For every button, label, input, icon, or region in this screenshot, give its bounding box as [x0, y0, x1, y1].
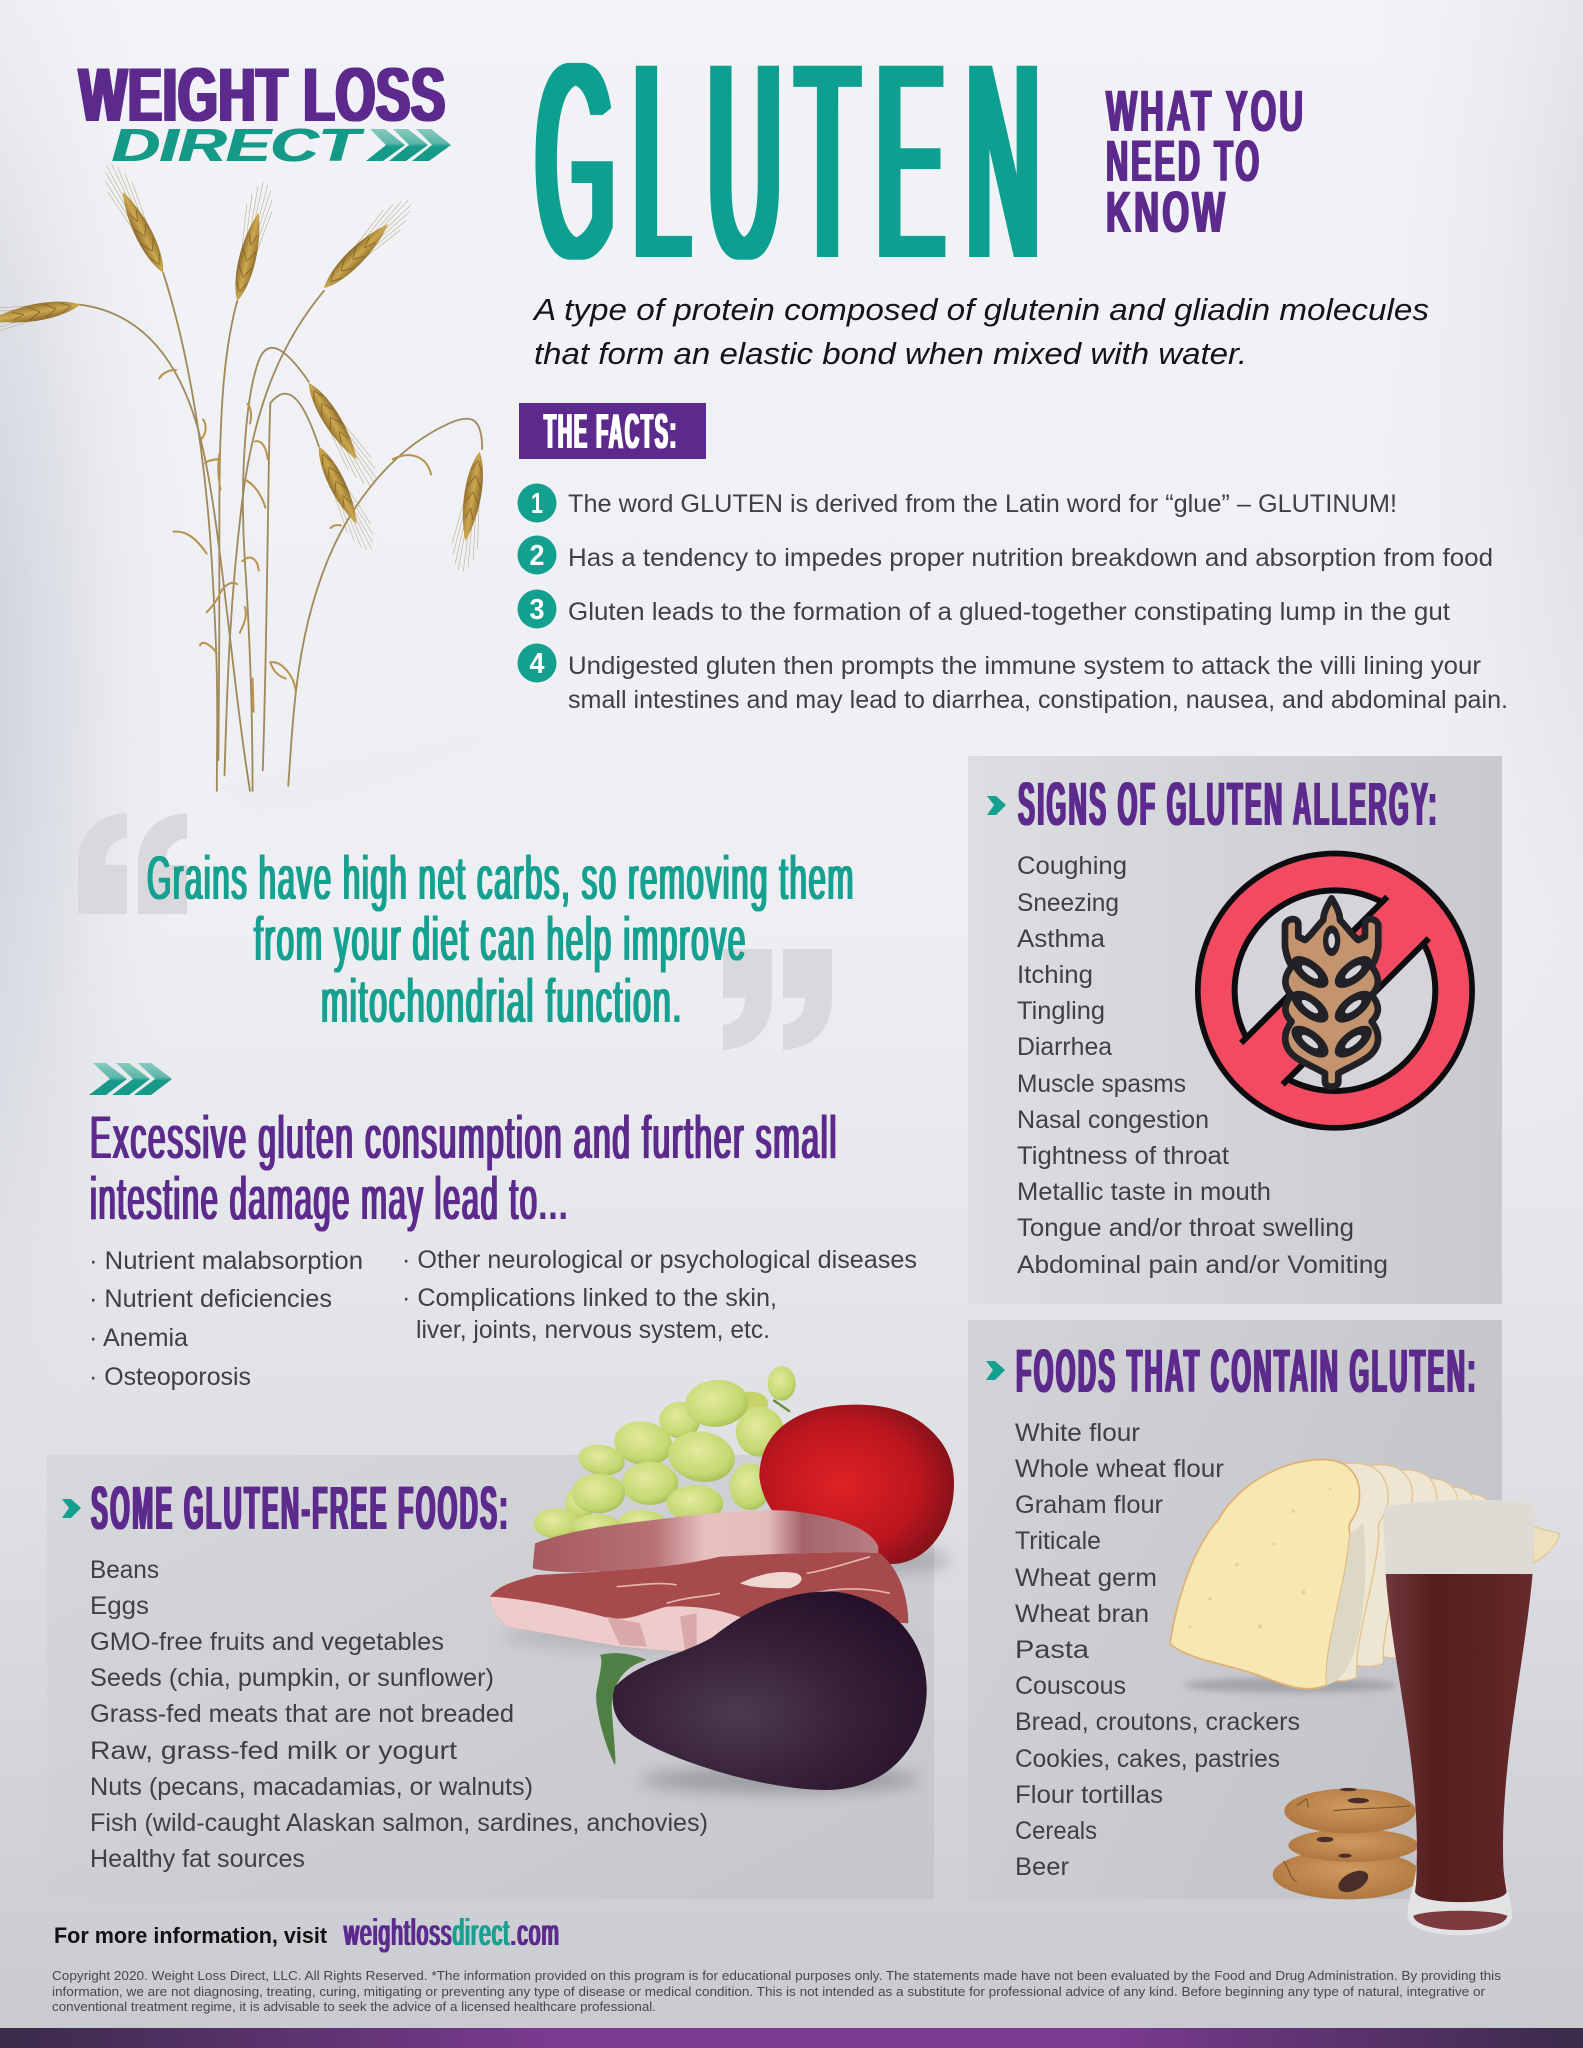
fact 4: Undigested gluten then prompts the immune system to attack the villi lining your — [568, 652, 1481, 680]
eggplant body — [613, 1592, 927, 1790]
fact 1: The word GLUTEN is derived from the Latin word for “glue” – GLUTINUM! — [568, 490, 1397, 518]
fact 2: Has a tendency to impedes proper nutrition breakdown and absorption from food — [568, 544, 1493, 572]
footer: more information: For more information, visit — [54, 1923, 328, 1948]
gluten-free list: Healthy fat sources — [90, 1845, 305, 1873]
fact 3 — [518, 590, 1450, 628]
fact 2 — [518, 536, 1493, 574]
heading: The Facts — [519, 403, 706, 459]
quote text: from your diet can help improve — [254, 905, 747, 973]
symptoms list: Sneezing — [1017, 889, 1119, 917]
foods list: Cookies, cakes, pastries — [1015, 1745, 1280, 1773]
gluten-free list: Raw, grass-fed milk or yogurt — [90, 1737, 457, 1765]
list: consequences column two: liver, joints, nervous system, etc. — [416, 1316, 770, 1344]
footer bar — [0, 2028, 1583, 2048]
fact 4: small intestines and may lead to diarrhea, constipation, nausea, and abdominal pain. — [568, 686, 1508, 714]
foods list: Pasta — [1015, 1636, 1089, 1664]
heading: excessive gluten consumption: intestine damage may lead to... — [90, 1165, 569, 1232]
foods list — [1015, 1419, 1300, 1881]
symptoms list — [1017, 852, 1388, 1279]
foods list: Whole wheat flour — [1015, 1455, 1224, 1483]
eggplant leaf — [596, 1653, 647, 1765]
list: consequences column one: · Anemia — [89, 1324, 188, 1352]
list: consequences column two: · Other neurological or psychological diseases — [402, 1246, 917, 1274]
subtitle: What you need to know — [1106, 79, 1306, 245]
bread stacked slices — [1208, 1463, 1493, 1681]
symptoms list: Abdominal pain and/or Vomiting — [1017, 1251, 1388, 1279]
fact 2: 2 — [530, 540, 544, 572]
cookies — [1273, 1788, 1421, 1899]
fact 1 — [518, 484, 1397, 522]
foods list: Beer — [1015, 1853, 1069, 1881]
illustration: grapes, apple, meat and eggplant — [490, 1366, 954, 1793]
illustration: wheat stalks — [0, 159, 510, 811]
symptoms list: Tingling — [1017, 997, 1105, 1025]
list: consequences column two — [402, 1246, 917, 1344]
fact 4 — [518, 644, 1508, 714]
footer: more information — [54, 1912, 560, 1953]
logo: Weight Loss Direct: WEIGHT LOSS — [79, 53, 446, 138]
logo: Weight Loss Direct: DIRECT — [112, 119, 365, 171]
foods list: Flour tortillas — [1015, 1781, 1163, 1809]
logo: Weight Loss Direct — [79, 53, 451, 171]
copyright notice: information, we are not diagnosing, treating, curing, mitigating or preventing any type of disease or medical condition. This is not intended as a substitute for professional advice of any kind. Before beginning any type of natural, integrative or — [52, 1985, 1485, 1999]
gluten-free list — [90, 1556, 708, 1873]
symptoms list: Asthma — [1017, 925, 1105, 953]
definition text — [532, 292, 1429, 371]
icon: arrow — [987, 796, 1006, 815]
gluten-free list: Grass-fed meats that are not breaded — [90, 1700, 514, 1728]
quote text: Grains have high net carbs, so removing them — [147, 844, 855, 912]
fact 3: Gluten leads to the formation of a glued-together constipating lump in the gut — [568, 598, 1450, 626]
fact 1: 1 — [531, 488, 543, 520]
list: consequences column one: · Nutrient malabsorption — [89, 1247, 363, 1275]
symptoms list: Metallic taste in mouth — [1017, 1178, 1271, 1206]
icon: teal chevrons — [89, 1063, 172, 1095]
foods list: Cereals — [1015, 1817, 1097, 1845]
gluten-free list: GMO-free fruits and vegetables — [90, 1628, 444, 1656]
fact 3: 3 — [530, 594, 544, 626]
icon: arrow — [62, 1499, 81, 1518]
symptoms list: Muscle spasms — [1017, 1070, 1186, 1098]
footer: more information: weightlossdirect.com — [343, 1912, 560, 1953]
icon: opening quote mark — [78, 813, 187, 914]
symptoms list: Diarrhea — [1017, 1033, 1112, 1061]
bread far slice — [1533, 1527, 1560, 1563]
text: THE FACTS: — [544, 405, 678, 459]
foods list: Wheat germ — [1015, 1564, 1157, 1592]
panel: some gluten-free foods — [47, 1455, 934, 1899]
subtitle: What you need to know: KNOW — [1106, 180, 1228, 245]
icon: arrow — [986, 1361, 1005, 1380]
symptoms list: Tightness of throat — [1017, 1142, 1229, 1170]
quote text — [147, 844, 855, 1035]
upper meat — [533, 1510, 878, 1572]
panel: some gluten-free foods: SOME GLUTEN-FREE FOODS: — [91, 1474, 510, 1542]
gluten-free list: Fish (wild-caught Alaskan salmon, sardines, anchovies) — [90, 1809, 708, 1837]
icon: closing quote mark — [723, 949, 832, 1050]
gluten-free list: Nuts (pecans, macadamias, or walnuts) — [90, 1773, 533, 1801]
apple — [759, 1405, 954, 1564]
panel: signs of gluten allergy — [968, 756, 1502, 1304]
panel: foods that contain gluten — [968, 1320, 1502, 1899]
gluten-free list: Eggs — [90, 1592, 149, 1620]
foods list: Bread, croutons, crackers — [1015, 1708, 1300, 1736]
title: GLUTEN: GLUTEN — [536, 7, 1039, 317]
definition text: that form an elastic bond when mixed with water. — [534, 336, 1247, 371]
gluten-free list: Seeds (chia, pumpkin, or sunflower) — [90, 1664, 494, 1692]
copyright notice: Copyright 2020. Weight Loss Direct, LLC. All Rights Reserved. *The information provided on this program is for educational purposes only. The statements made have not been evaluated by the Food and Drug Administration. By providing this — [52, 1969, 1501, 1983]
facts list — [518, 484, 1508, 714]
symptoms list: Tongue and/or throat swelling — [1017, 1214, 1354, 1242]
heading: excessive gluten consumption: Excessive gluten consumption and further small — [90, 1104, 838, 1171]
foods list: Wheat bran — [1015, 1600, 1149, 1628]
quote text: mitochondrial function. — [321, 967, 683, 1035]
foods list: Graham flour — [1015, 1491, 1163, 1519]
symptoms list: Coughing — [1017, 852, 1127, 880]
foods list: White flour — [1015, 1419, 1140, 1447]
foods list: Couscous — [1015, 1672, 1126, 1700]
fact 4: 4 — [530, 648, 544, 680]
list: consequences column one: · Nutrient deficiencies — [89, 1285, 332, 1313]
subtitle: What you need to know: WHAT YOU — [1106, 79, 1306, 144]
lower meat — [490, 1553, 908, 1652]
list: consequences column one: · Osteoporosis — [89, 1363, 251, 1391]
foods list: Triticale — [1015, 1527, 1101, 1555]
bread front slice — [1170, 1460, 1365, 1689]
list: consequences column two: · Complications linked to the skin, — [402, 1284, 777, 1312]
gluten-free list: Beans — [90, 1556, 159, 1584]
icon: no wheat symbol — [1195, 851, 1475, 1131]
list: consequences column one — [89, 1247, 363, 1391]
symptoms list: Itching — [1017, 961, 1093, 989]
beer glass — [1383, 1500, 1535, 1935]
copyright notice — [52, 1969, 1501, 2014]
grapes — [533, 1366, 796, 1539]
heading: excessive gluten consumption — [90, 1104, 838, 1232]
definition text: A type of protein composed of glutenin and gliadin molecules — [532, 292, 1429, 327]
copyright notice: conventional treatment regime, it is advisable to seek the advice of a licensed healthcare professional. — [52, 2000, 656, 2014]
illustration: bread, cookies and beer glass — [1170, 1460, 1560, 1935]
symptoms list: Nasal congestion — [1017, 1106, 1209, 1134]
subtitle: What you need to know: NEED TO — [1106, 129, 1262, 194]
